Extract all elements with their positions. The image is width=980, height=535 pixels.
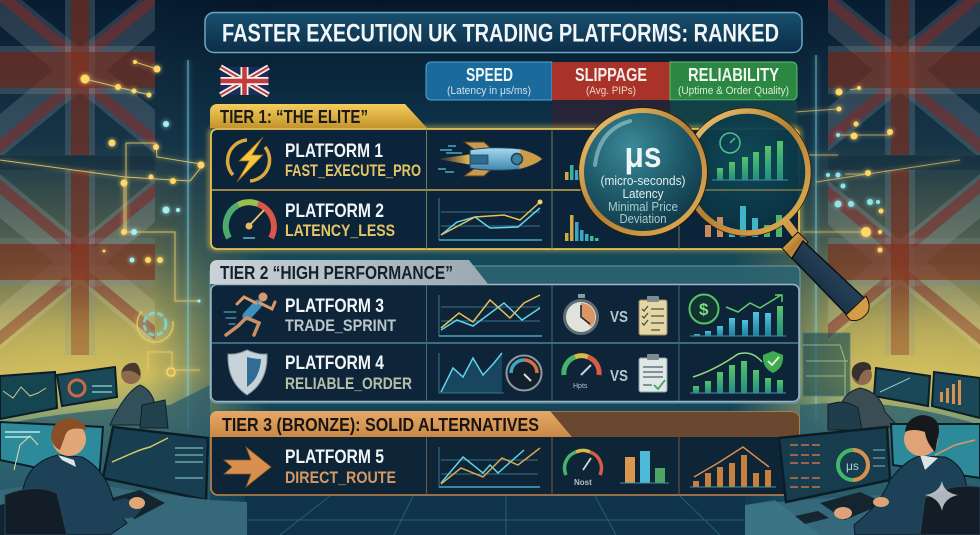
person: back trader: [828, 362, 897, 430]
chair: [5, 488, 67, 535]
front desk: [745, 490, 980, 535]
title bar: FASTER EXECUTION UK TRADING PLATFORMS: RANKED: [222, 20, 779, 48]
chart: platform 5 reliability: [690, 447, 776, 487]
icon: arrow: [224, 447, 271, 487]
monitor: front latency screen: μs: [846, 459, 859, 473]
back wall screen right: [803, 333, 850, 396]
icon: lightning: [228, 137, 270, 182]
icon: clipboard checklist: [639, 296, 667, 335]
back desk left: [0, 385, 210, 500]
icon: runner: [224, 292, 275, 335]
tier 1 tab: TIER 1: “THE ELITE”: [220, 107, 368, 127]
text: platform 1: FAST_EXECUTE_PRO: [285, 161, 421, 180]
chart: platform 4 speed: [439, 353, 542, 393]
icon: slippage gauge: [564, 356, 599, 390]
panel: tier 1: [210, 104, 800, 249]
text: platform 2: PLATFORM 2: [285, 201, 384, 222]
monitor: back center: [57, 367, 117, 406]
keyboard: [105, 490, 165, 519]
icon: gauge platform 5: Nost: [574, 478, 592, 487]
lens text: Deviation: [620, 212, 667, 226]
column header: speed: SPEED: [466, 65, 513, 85]
text: platform 5: [285, 447, 396, 487]
text: platform 3: TRADE_SPRINT: [285, 316, 397, 335]
chart: platform 5 speed: [439, 447, 540, 487]
text: platform 3: PLATFORM 3: [285, 296, 384, 317]
panel: tier 2: [210, 260, 800, 403]
text: platform 5: PLATFORM 5: [285, 447, 384, 468]
right union flag backdrop: [828, 0, 980, 355]
tier 1 glow: [210, 128, 800, 249]
monitor: front right: [103, 427, 208, 500]
monitor: front latency screen: [779, 427, 890, 502]
column header: reliability: RELIABILITY: [688, 65, 779, 85]
tier 2 table: [211, 284, 799, 402]
chart: platform 4 reliability: [690, 351, 786, 393]
monitor: front left: [0, 422, 103, 481]
chair: [920, 486, 980, 535]
column header: speed: [426, 62, 552, 100]
icon: gauge platform 5: [565, 450, 601, 487]
back desk right: [800, 403, 980, 500]
text: vs: VS: [610, 309, 628, 326]
phone: [795, 511, 829, 524]
magnifier: reliability lens: [683, 108, 869, 321]
gold glow left: [0, 310, 185, 400]
lens text: (micro-seconds): [600, 173, 686, 188]
monitor: back right 1: [874, 368, 930, 406]
text: platform 4: [285, 353, 412, 393]
tier 2 tab: TIER 2 “HIGH PERFORMANCE”: [220, 263, 453, 283]
icon: UK flag: [220, 67, 268, 95]
chart: platform 2 speed: [439, 198, 542, 240]
icon: shield: [228, 350, 267, 395]
magnifier handle: [782, 222, 869, 321]
title bar: [205, 12, 802, 52]
chart: platform 1 slippage: [565, 165, 578, 180]
chart: platform 2 reliability: [705, 206, 782, 237]
tier 3 tab: TIER 3 (BRONZE): SOLID ALTERNATIVES: [222, 415, 539, 435]
icon: stopwatch: [564, 294, 598, 334]
tier 3 band: [211, 412, 799, 437]
column tints behind tier 1: [552, 100, 797, 130]
person: back trader: [110, 363, 168, 428]
front desk: [0, 480, 247, 535]
column header: reliability: [670, 62, 797, 100]
text: platform 1: PLATFORM 1: [285, 141, 383, 162]
person: front trader: [834, 415, 967, 535]
text: platform 2: [285, 201, 395, 240]
column header: slippage: SLIPPAGE: [575, 65, 647, 85]
text: platform 4: PLATFORM 4: [285, 353, 384, 374]
gold glow right: [830, 310, 980, 400]
right trading desk scene: [745, 362, 980, 535]
keyboard: [820, 492, 885, 520]
left trading desk scene: [0, 363, 247, 535]
watermark sparkle: [925, 481, 958, 511]
tier 1 tab: [210, 104, 427, 128]
tier 1 table: [211, 129, 799, 249]
right circuit network: [795, 55, 960, 420]
chart: platform 3 reliability: [690, 294, 786, 336]
icon: order clipboard: [639, 354, 667, 392]
chart: platform 3 reliability: $: [699, 300, 709, 319]
text: platform 5: DIRECT_ROUTE: [285, 468, 396, 487]
chart: platform 2 slippage: [565, 215, 598, 241]
person: front trader: [23, 418, 145, 535]
icon: rocket: [437, 142, 542, 176]
chart: platform 1 reliability: [712, 133, 788, 180]
column header: speed: (Latency in μs/ms): [447, 85, 531, 97]
column header: slippage: [552, 62, 670, 100]
text: platform 2: LATENCY_LESS: [285, 221, 395, 240]
column header: slippage: (Avg. PIPs): [586, 85, 636, 97]
column header: reliability: (Uptime & Order Quality): [678, 85, 789, 97]
text: platform 4: RELIABLE_ORDER: [285, 374, 412, 393]
lens text: μs: [624, 134, 662, 175]
chart: platform 3 speed: [439, 295, 542, 336]
icon: gauge platform 2: [226, 202, 274, 238]
monitor: back left: [0, 372, 57, 419]
monitor: back right 2: [932, 372, 980, 418]
text: platform 1: [285, 141, 421, 180]
chart: platform 5 slippage: [620, 451, 669, 483]
tier 2 frame: [210, 266, 800, 403]
text: platform 3: [285, 296, 397, 335]
left circuit network: [0, 60, 204, 430]
lens text: [600, 134, 686, 226]
magnifier: micro-seconds lens: [579, 108, 707, 236]
panel: tier 3: [210, 411, 799, 495]
text: vs: VS: [610, 368, 628, 385]
tier 3 table: [211, 412, 799, 495]
lens text: Latency: [622, 186, 664, 201]
monitor: front right panel: [891, 424, 980, 478]
lens text: Minimal Price: [608, 200, 678, 214]
left union flag backdrop: [0, 0, 155, 355]
icon: slippage gauge: Hpts: [573, 383, 588, 390]
